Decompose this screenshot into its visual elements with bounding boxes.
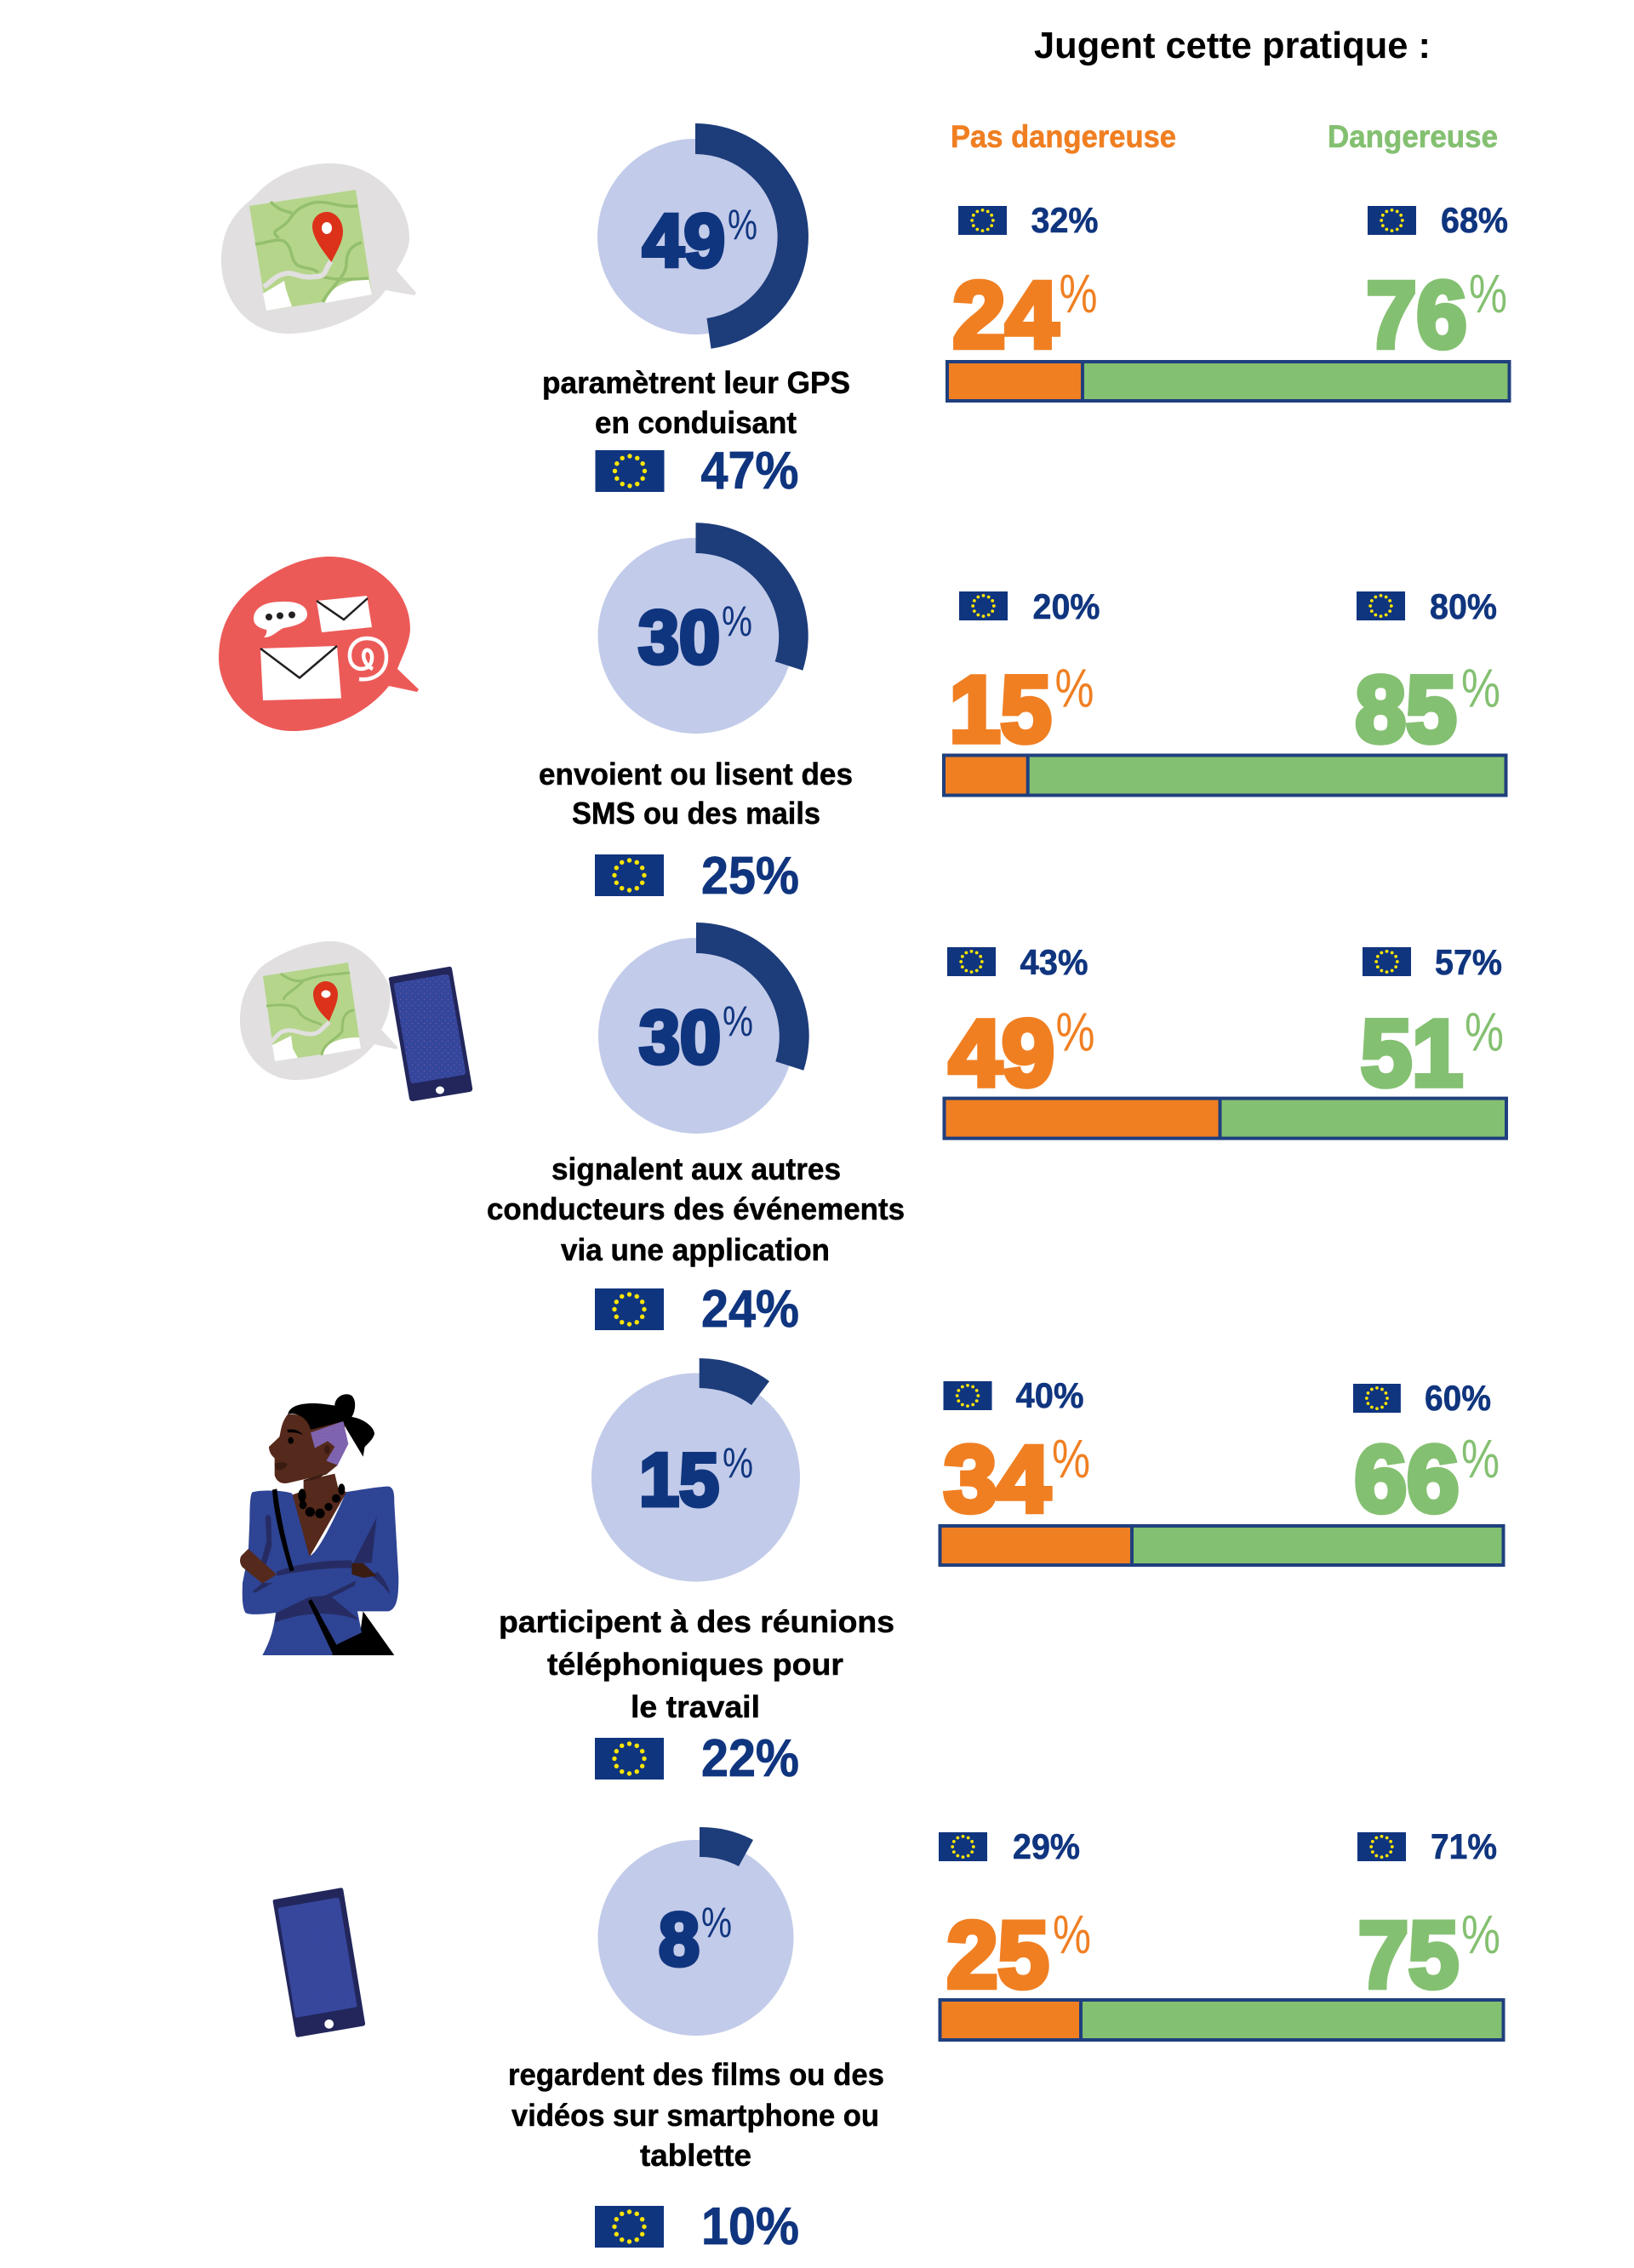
EU dangereuse 68%: 68%	[1441, 200, 1508, 240]
value: 24%: 24	[953, 263, 1059, 368]
text: participent à des réunions: le travail	[631, 1689, 760, 1724]
donut: 30%: 30	[638, 595, 720, 679]
stacked bar 34 / 66	[938, 1524, 1505, 1567]
value: 85%: 85	[1355, 657, 1457, 763]
text: paramètrent leur GPS en conduisant: paramètrent leur GPS	[542, 365, 850, 400]
icon: smartphone	[273, 1888, 365, 2037]
EU average 22%	[595, 1729, 799, 1788]
value: 15%: %	[1055, 657, 1094, 718]
legend: Pas dangereuse: Pas dangereuse	[951, 119, 1176, 154]
text: signalent aux autres conducteurs: conducteurs des événements	[487, 1191, 905, 1226]
text: regardent des films: vidéos sur smartphone ou	[511, 2098, 879, 2133]
donut: 30%: %	[723, 997, 753, 1045]
EU pas dangereuse 40%	[943, 1375, 1084, 1415]
donut: 30%: 30	[639, 995, 721, 1079]
donut: 15%	[591, 1358, 800, 1581]
EU pas dangereuse 20%	[959, 586, 1100, 626]
EU pas dangereuse 32%: 32%	[1031, 200, 1098, 240]
EU pas dangereuse 29%: 29%	[1013, 1826, 1080, 1866]
illustration: woman with crossed arms	[240, 1394, 398, 1655]
stacked bar 15 / 85	[942, 754, 1508, 797]
EU pas dangereuse 43%: 43%	[1020, 942, 1088, 982]
stacked bar 25 / 75	[938, 1998, 1505, 2042]
EU average 24%	[595, 1280, 799, 1339]
EU dangereuse 80%	[1357, 586, 1497, 626]
EU dangereuse 71%	[1357, 1826, 1497, 1866]
icon: map speech bubble	[221, 163, 416, 334]
EU dangereuse 60%	[1353, 1378, 1491, 1418]
EU average 25%	[595, 847, 799, 905]
text: paramètrent leur GPS en conduisant	[542, 365, 850, 440]
value: 51%: %	[1465, 1001, 1504, 1062]
value: 75%: 75	[1358, 1903, 1459, 2008]
value: 76%: 76	[1367, 263, 1467, 368]
stacked bar 49 / 51	[943, 1097, 1508, 1140]
EU average 24%: 24%	[701, 1280, 799, 1339]
donut: 49%	[597, 123, 808, 349]
value: 24%: %	[1059, 263, 1098, 324]
value: 75%: %	[1461, 1904, 1500, 1965]
text: signalent aux autres conducteurs	[487, 1151, 905, 1267]
EU pas dangereuse 40%: 40%	[1016, 1375, 1084, 1415]
value: 15%: 15	[950, 657, 1052, 763]
donut: 49%: %	[728, 201, 757, 249]
value: 25%: %	[1053, 1904, 1091, 1965]
value: 34%: %	[1052, 1428, 1090, 1489]
EU dangereuse 60%: 60%	[1425, 1378, 1491, 1418]
text: regardent des films: regardent des films ou des	[508, 2057, 884, 2092]
value: 34%: 34	[944, 1427, 1050, 1532]
panel: row 3 app	[240, 923, 1508, 1339]
EU average 25%: 25%	[701, 847, 799, 905]
EU average 47%: 47%	[701, 442, 798, 500]
panel: row 5 films	[273, 1826, 1505, 2256]
EU dangereuse 57%: 57%	[1435, 942, 1502, 982]
donut: 8%: %	[701, 1899, 732, 1946]
panel: row 4 conference calls	[240, 1358, 1505, 1788]
EU pas dangereuse 29%	[939, 1826, 1080, 1866]
value: 51%: 51	[1361, 1001, 1463, 1106]
value: 49%: 49	[949, 1001, 1054, 1106]
text: signalent aux autres conducteurs: via une application	[561, 1232, 830, 1267]
text: regardent des films: tablette	[640, 2138, 751, 2173]
EU average 47%	[596, 442, 798, 500]
text: participent à des réunions: téléphoniques pour	[547, 1647, 843, 1682]
donut: 15%: 15	[639, 1437, 719, 1522]
text: participent à des réunions: participent à des réunions	[499, 1604, 894, 1639]
donut: 15%: %	[723, 1439, 753, 1487]
text: envoient ou lisent des SMS ou des mails: envoient ou lisent des	[539, 757, 853, 791]
value: 25%: 25	[946, 1903, 1048, 2008]
text: signalent aux autres conducteurs: signalent aux autres	[551, 1151, 841, 1186]
panel: row 1 GPS	[221, 123, 1511, 500]
EU average 10%	[595, 2197, 799, 2256]
donut: 49%: 49	[643, 198, 725, 283]
value: 66%: 66	[1355, 1427, 1459, 1532]
stacked bar 24 / 76	[946, 360, 1511, 403]
EU dangereuse 68%	[1368, 200, 1508, 240]
EU dangereuse 71%: 71%	[1431, 1826, 1497, 1866]
panel: row 2 SMS	[219, 523, 1508, 905]
legend: Dangereuse: Dangereuse	[1328, 119, 1498, 154]
EU pas dangereuse 32%	[958, 200, 1098, 240]
EU dangereuse 57%	[1363, 942, 1502, 982]
value: 66%: %	[1461, 1428, 1500, 1489]
donut: 30%	[598, 923, 809, 1134]
text: participent à des réunions	[499, 1604, 894, 1724]
EU average 10%: 10%	[701, 2197, 799, 2256]
EU average 22%: 22%	[701, 1729, 799, 1788]
value: 49%: %	[1055, 1001, 1094, 1062]
heading: Jugent cette pratique: Jugent cette pratique :	[1034, 25, 1431, 66]
text: envoient ou lisent des SMS ou des mails: SMS ou des mails	[572, 796, 820, 831]
icon: smartphone	[389, 967, 472, 1101]
EU pas dangereuse 43%	[947, 942, 1088, 982]
text: paramètrent leur GPS en conduisant: en conduisant	[595, 405, 797, 440]
value: 76%: %	[1469, 263, 1507, 324]
donut: 30%	[597, 523, 808, 734]
donut: 8%	[597, 1827, 793, 2036]
text: regardent des films	[508, 2057, 884, 2173]
icon: messages speech bubble	[219, 557, 419, 731]
value: 85%: %	[1461, 657, 1500, 718]
donut: 8%: 8	[659, 1897, 700, 1981]
donut: 30%: %	[722, 597, 752, 645]
text: envoient ou lisent des SMS ou des mails	[539, 757, 853, 831]
EU pas dangereuse 20%: 20%	[1033, 586, 1100, 626]
icon: map bubble	[240, 941, 397, 1080]
EU dangereuse 80%: 80%	[1430, 586, 1497, 626]
